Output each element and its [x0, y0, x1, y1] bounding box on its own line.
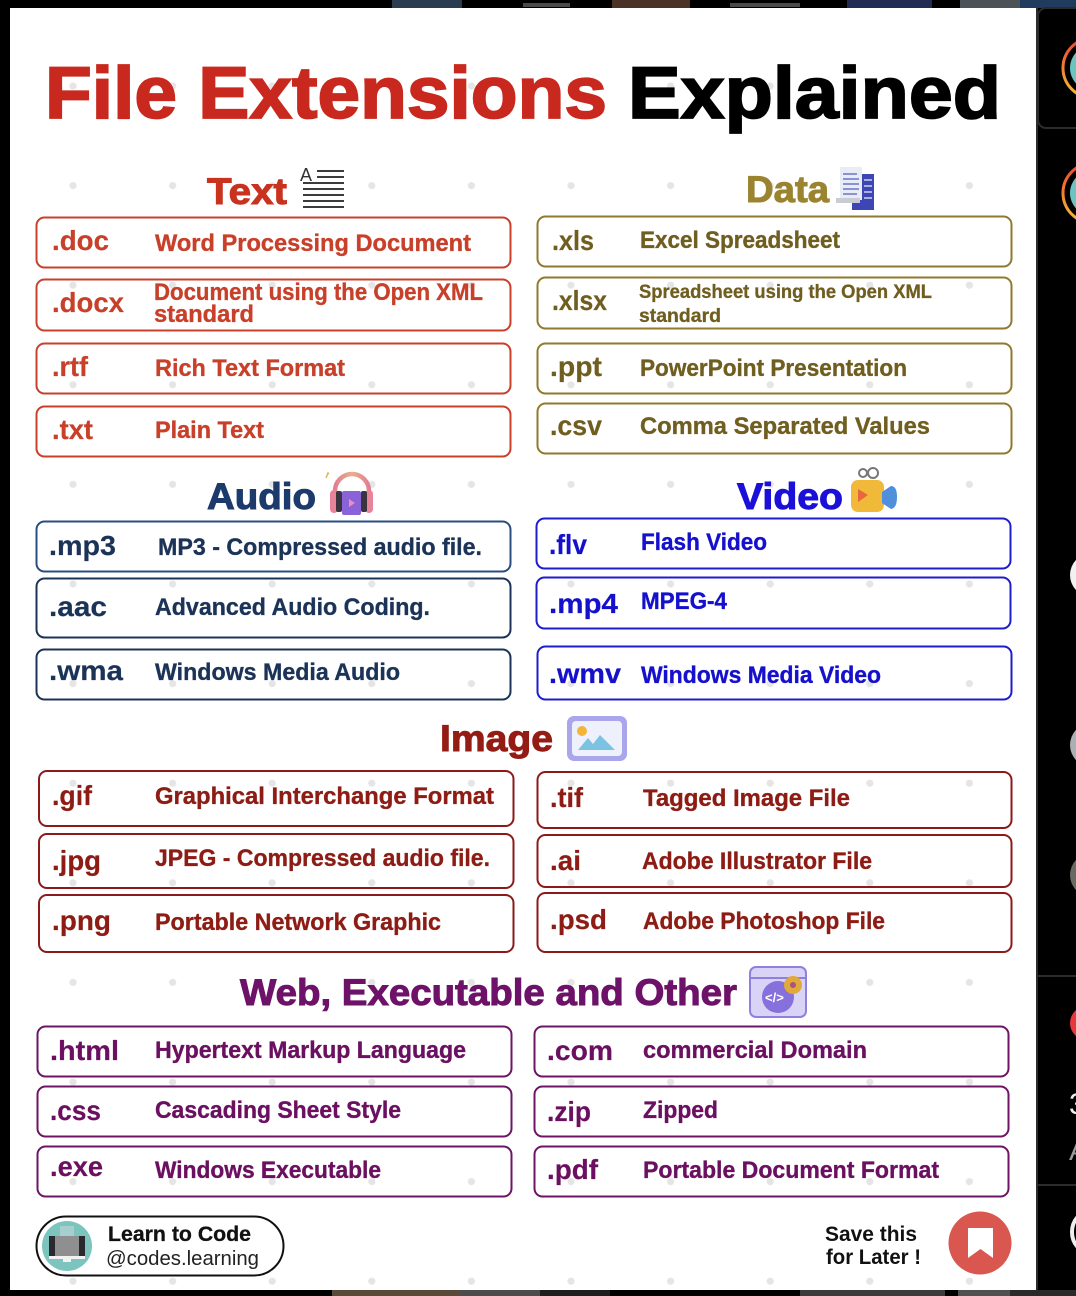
author badge: [36, 1216, 284, 1276]
row: .psd: .psd: [550, 904, 607, 935]
row: .rtf: [36, 344, 510, 394]
row: .pdf: Portable Document Format: [643, 1157, 939, 1184]
icon: picture frame: [567, 716, 627, 761]
row: .ppt: .ppt: [550, 351, 602, 382]
row: .png: .png: [52, 905, 111, 936]
icon: text document lines: A: [300, 165, 312, 185]
row: .tif: .tif: [550, 782, 584, 813]
row: .doc: [36, 218, 510, 268]
heading: Text: Text: [207, 171, 287, 212]
panel: audio formats: [36, 473, 510, 700]
row: .pdf: .pdf: [547, 1154, 599, 1185]
save for later text: Save this: [825, 1223, 917, 1246]
panel: image formats: [39, 716, 1012, 952]
row: .png: [39, 895, 514, 952]
row: .aac: .aac: [49, 591, 107, 622]
icon: text document lines: [300, 165, 344, 207]
row: .exe: Windows Executable: [155, 1157, 381, 1184]
row: .html: .html: [50, 1035, 119, 1066]
row: .wma: .wma: [49, 655, 123, 686]
row: .jpg: [39, 834, 514, 888]
row: .xls: Excel Spreadsheet: [640, 227, 840, 254]
row: .mp4: MPEG-4: [641, 588, 728, 615]
row: .mp4: [536, 578, 1010, 628]
row: .txt: Plain Text: [155, 417, 264, 444]
row: .docx: Document using the Open XML: [154, 279, 483, 306]
row: .com: [534, 1026, 1008, 1076]
icon: headphones: [326, 473, 373, 515]
row: .tif: Tagged Image File: [643, 785, 850, 812]
row: .psd: Adobe Photoshop File: [643, 908, 885, 935]
row: .flv: Flash Video: [641, 529, 767, 556]
row: .pdf: [534, 1146, 1008, 1196]
row: .com: commercial Domain: [643, 1037, 867, 1064]
icon: code window: [750, 967, 806, 1017]
row: .xls: [538, 216, 1012, 266]
icon: video camera: [851, 468, 897, 512]
heading: Web, Executable and Other: Web, Executable and Other: [240, 972, 737, 1013]
author badge: Learn to Code: [108, 1223, 251, 1246]
icon: code window: </>: [765, 990, 784, 1005]
row: .html: Hypertext Markup Language: [155, 1037, 466, 1064]
title: File Extensions: [45, 53, 607, 134]
row: .exe: [38, 1146, 512, 1196]
row: .ai: Adobe Illustrator File: [642, 848, 872, 875]
row: .gif: Graphical Interchange Format: [155, 783, 494, 810]
row: .mp3: MP3 - Compressed audio file.: [158, 534, 482, 561]
row: .xlsx: standard: [639, 306, 721, 327]
row: .css: Cascading Sheet Style: [155, 1097, 401, 1124]
panel: data formats: [538, 167, 1012, 454]
heading: Image: Image: [440, 718, 553, 759]
row: .wma: Windows Media Audio: [155, 659, 400, 686]
row: .wma: [36, 650, 510, 700]
save for later text: [825, 1223, 921, 1269]
row: .aac: Advanced Audio Coding.: [155, 594, 430, 621]
icon: bookmark button: [948, 1212, 1012, 1274]
row: .docx: .docx: [52, 287, 124, 318]
row: .png: Portable Network Graphic: [155, 909, 441, 936]
row: .txt: [36, 406, 510, 456]
row: .jpg: JPEG - Compressed audio file.: [155, 845, 490, 872]
row: .wmv: [538, 646, 1012, 700]
row: .ai: [538, 835, 1012, 887]
row: .csv: .csv: [550, 410, 602, 441]
row: .flv: [536, 518, 1010, 568]
row: .docx: [36, 279, 510, 330]
save for later text: for Later !: [826, 1246, 921, 1269]
panel: video formats: [536, 468, 1012, 700]
row: .gif: [39, 771, 514, 826]
row: .xlsx: Spreadsheet using the Open XML: [639, 282, 932, 303]
row: .xls: .xls: [552, 225, 594, 256]
row: .aac: [36, 578, 510, 638]
row: .flv: .flv: [549, 529, 587, 560]
title: [45, 53, 1001, 134]
row: .html: [38, 1026, 512, 1076]
row: .css: .css: [50, 1095, 101, 1126]
row: .xlsx: [538, 278, 1012, 328]
row: .ppt: PowerPoint Presentation: [640, 355, 907, 382]
row: .csv: Comma Separated Values: [640, 413, 930, 440]
row: .mp3: .mp3: [49, 530, 116, 561]
row: .ppt: [538, 344, 1012, 394]
row: .jpg: .jpg: [52, 845, 101, 876]
row: .wmv: .wmv: [549, 658, 621, 689]
row: .com: .com: [547, 1035, 613, 1066]
row: .mp3: [36, 522, 510, 572]
row: .ai: .ai: [550, 845, 581, 876]
panel: web, executable and other: [38, 967, 1008, 1196]
row: .exe: .exe: [50, 1151, 103, 1182]
row: .doc: Word Processing Document: [155, 230, 471, 257]
icon: computer avatar: [42, 1221, 92, 1271]
heading: Video: Video: [737, 476, 843, 517]
row: .psd: [538, 893, 1012, 952]
icon: data documents: [836, 167, 874, 210]
row: .rtf: Rich Text Format: [155, 355, 345, 382]
row: .docx: standard: [154, 301, 254, 328]
row: .tif: [538, 772, 1012, 828]
row: .gif: .gif: [52, 780, 93, 811]
title: Explained: [628, 53, 1001, 134]
row: .css: [38, 1086, 512, 1136]
row: .doc: .doc: [52, 225, 109, 256]
heading: Audio: Audio: [207, 476, 316, 517]
row: .zip: [534, 1086, 1008, 1136]
row: .txt: .txt: [52, 414, 93, 445]
row: .zip: Zipped: [643, 1097, 718, 1124]
row: .xlsx: .xlsx: [552, 285, 607, 316]
panel: text formats: [36, 165, 510, 456]
row: .wmv: Windows Media Video: [641, 662, 881, 689]
row: .csv: [538, 404, 1012, 454]
heading: Data: Data: [746, 169, 829, 210]
row: .zip: .zip: [547, 1096, 591, 1127]
author badge: @codes.learning: [106, 1248, 259, 1270]
row: .rtf: .rtf: [52, 351, 89, 382]
row: .mp4: .mp4: [549, 588, 618, 619]
